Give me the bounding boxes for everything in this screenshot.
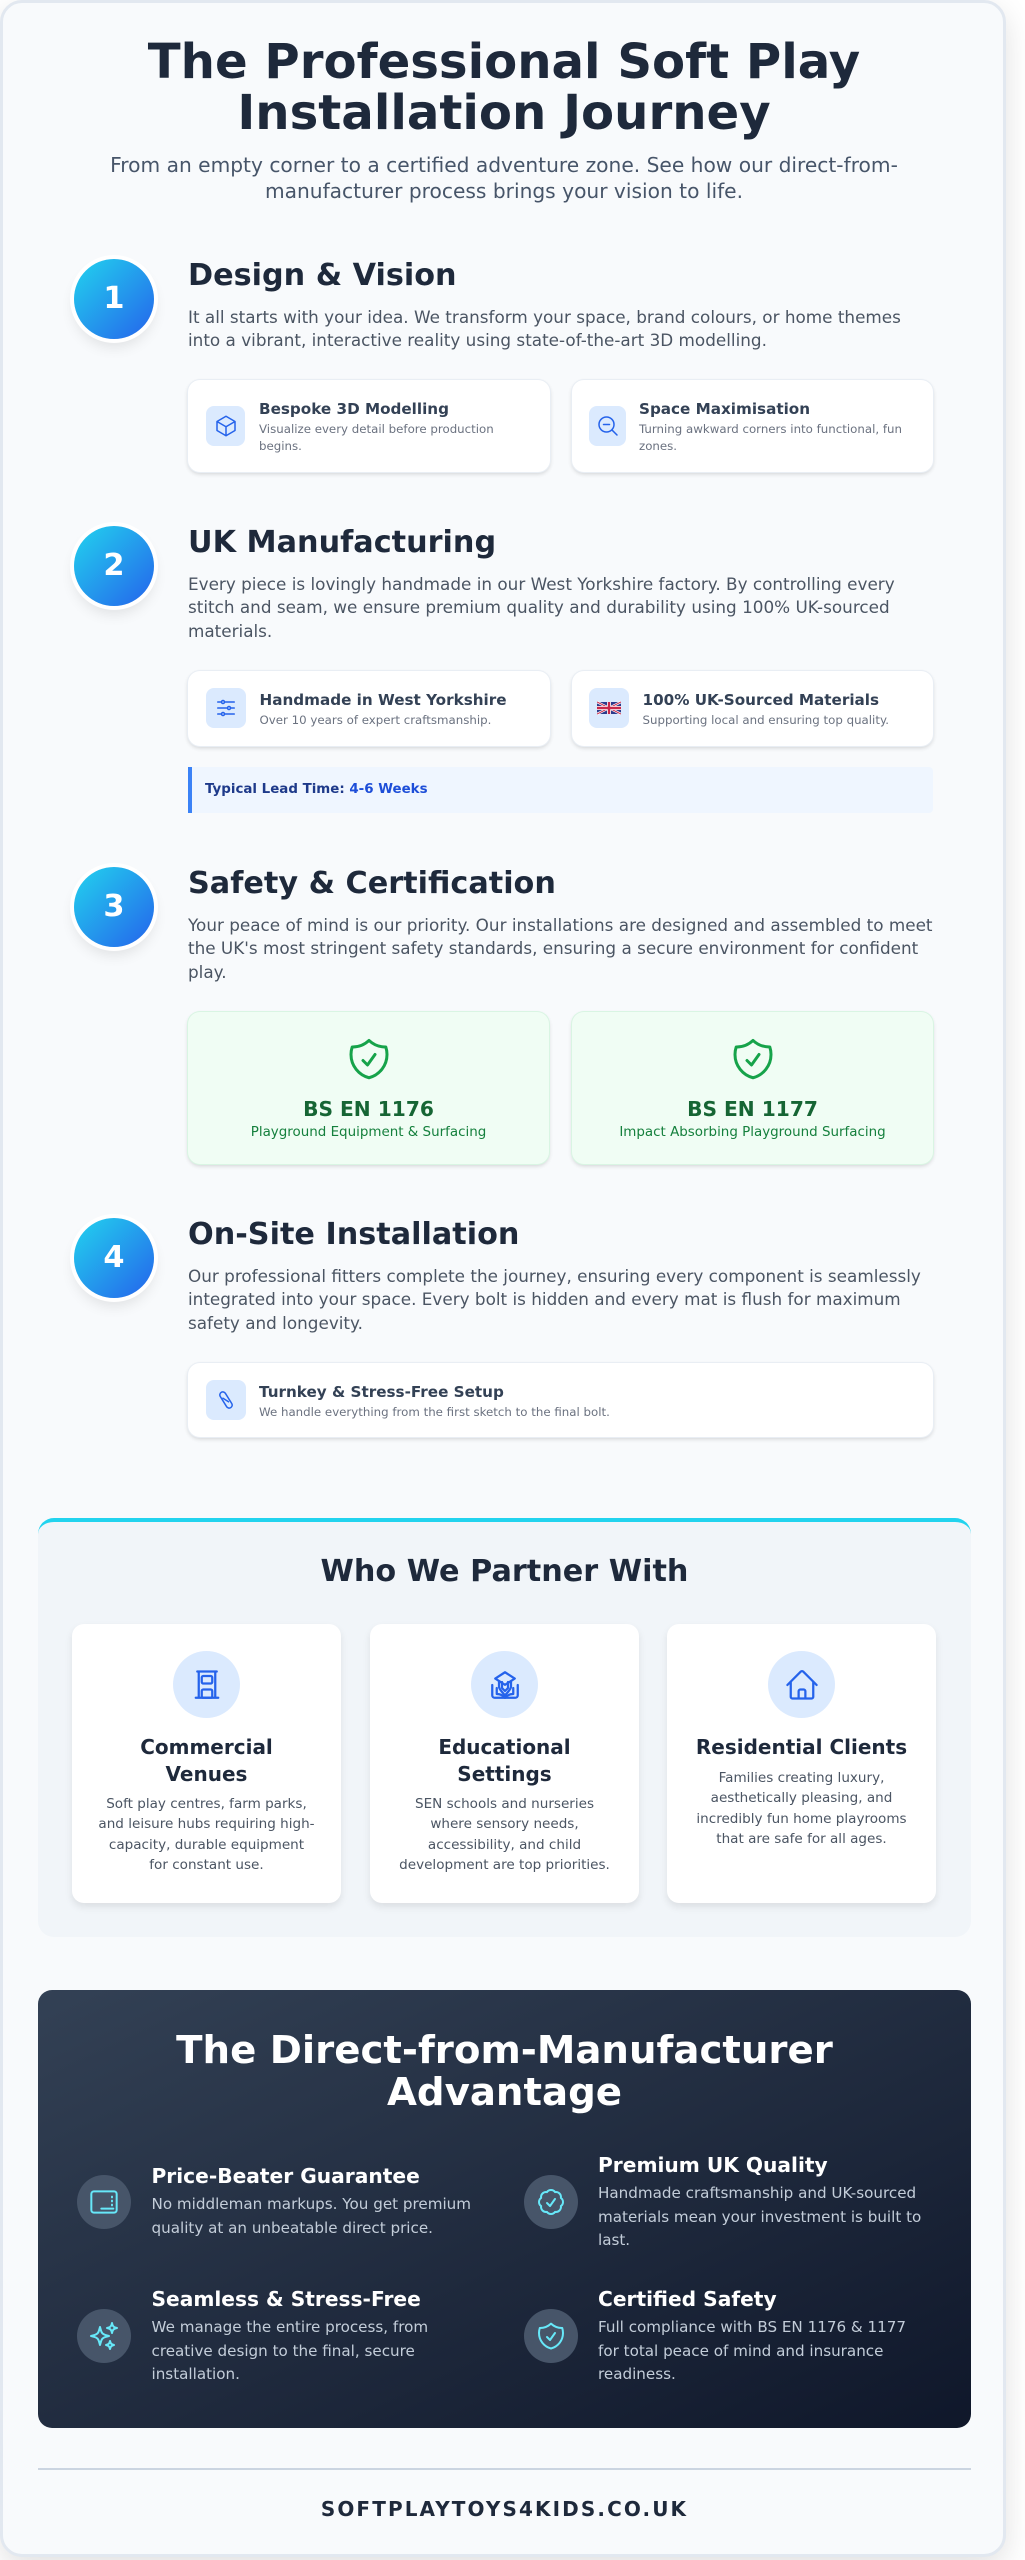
panel: direct-from-manufacturer advantage [38, 1990, 971, 2428]
benefit text: last. [598, 2231, 630, 2249]
step 1 number badge: 1 [103, 281, 125, 316]
card description: Visualize every detail before production [259, 422, 494, 436]
title: The Professional Soft Play [148, 34, 860, 90]
benefit text: Handmade craftsmanship and UK-sourced [598, 2184, 916, 2202]
certification code: BS EN 1176 [303, 1097, 434, 1121]
card title: Settings [457, 1762, 552, 1786]
step 4 heading: On-Site Installation [188, 1217, 519, 1252]
benefit title: Price-Beater Guarantee [152, 2164, 420, 2188]
card title: Bespoke 3D Modelling [259, 400, 449, 418]
step 1 heading: Design & Vision [188, 258, 457, 293]
step 2 text [188, 574, 895, 641]
card title [140, 1735, 273, 1786]
step 3 number badge [74, 867, 154, 947]
step 3 text: the UK's most stringent safety standards, ensuring a secure environment for confident [188, 938, 918, 958]
footer website: SOFTPLAYTOYS4KIDS.CO.UK [321, 2497, 688, 2521]
card title: Turnkey & Stress-Free Setup [259, 1382, 504, 1400]
icon: magnifier minus [589, 406, 626, 446]
benefit text: creative design to the final, secure [152, 2342, 415, 2360]
step 4 number badge: 4 [103, 1240, 125, 1275]
title: Installation Journey [237, 85, 771, 141]
card: residential clients [667, 1624, 936, 1903]
step 4 text: integrated into your space. Every bolt is hidden and every mat is flush for maximum [188, 1289, 901, 1309]
certification description: Impact Absorbing Playground Surfacing [619, 1125, 886, 1140]
step 3 number badge: 3 [103, 889, 125, 924]
icon: shield check [350, 1038, 388, 1080]
card description: development are top priorities. [399, 1857, 610, 1873]
icon: graduation cap and book [471, 1651, 538, 1718]
icon: price tablet [77, 2175, 131, 2229]
card description: Families creating luxury, [719, 1770, 884, 1786]
card description: begins. [259, 439, 302, 453]
card description: Over 10 years of expert craftsmanship. [260, 712, 491, 726]
card description: Soft play centres, farm parks, [106, 1796, 307, 1812]
benefit text: for total peace of mind and insurance [598, 2342, 883, 2360]
card title: Handmade in West Yorkshire [260, 691, 507, 709]
card description: zones. [639, 439, 677, 453]
step 1 text: into a vibrant, interactive reality using state-of-the-art 3D modelling. [188, 330, 767, 350]
card description: SEN schools and nurseries [415, 1796, 594, 1812]
certification card: BS EN 1177 [572, 1012, 933, 1164]
benefit text [152, 2195, 471, 2237]
card description [259, 422, 494, 453]
certification card: BS EN 1176 [188, 1012, 549, 1164]
card description [399, 1796, 610, 1873]
benefit text: Full compliance with BS EN 1176 & 1177 [598, 2318, 906, 2336]
benefit title: Premium UK Quality [598, 2153, 828, 2177]
icon: house [768, 1651, 835, 1718]
benefit text [598, 2318, 906, 2383]
card description: accessibility, and child [428, 1837, 581, 1853]
icon: building [173, 1651, 240, 1718]
step 2 heading: UK Manufacturing [188, 525, 496, 560]
card: 100% UK-Sourced Materials [572, 671, 933, 746]
heading: advantage [176, 2028, 833, 2114]
card description: that are safe for all ages. [716, 1831, 887, 1847]
certification code: BS EN 1177 [687, 1097, 818, 1121]
benefit text: readiness. [598, 2365, 676, 2383]
benefit text [152, 2318, 428, 2383]
icon: sliders [206, 688, 246, 728]
card: Space Maximisation [572, 380, 933, 472]
card description: Supporting local and ensuring top quality. [642, 712, 889, 726]
card title: Venues [166, 1762, 247, 1786]
card: educational settings [370, 1624, 639, 1903]
panel: who we partner with [38, 1518, 971, 1937]
step 4 text: safety and longevity. [188, 1313, 363, 1333]
card description: aesthetically pleasing, and [711, 1790, 892, 1806]
icon: sparkles [77, 2309, 131, 2363]
card description: for constant use. [149, 1857, 264, 1873]
icon: cube [206, 406, 245, 446]
step 3 text: play. [188, 962, 227, 982]
card title [438, 1735, 571, 1786]
icon: check badge [524, 2175, 578, 2229]
step 3 text: Your peace of mind is our priority. Our installations are designed and assembled to meet [188, 914, 933, 934]
card title: Commercial [140, 1735, 273, 1759]
icon: wrench [206, 1380, 246, 1420]
step 3 heading: Safety & Certification [188, 866, 556, 901]
card description: where sensory needs, [430, 1816, 579, 1832]
icon: UK flag [589, 688, 629, 728]
card description: Turning awkward corners into functional, fun [639, 422, 902, 436]
benefit text: quality at an unbeatable direct price. [152, 2219, 433, 2237]
card title: Educational [438, 1735, 571, 1759]
step 1 text: It all starts with your idea. We transform your space, brand colours, or home themes [188, 306, 901, 326]
card description [696, 1770, 907, 1847]
icon: shield check [734, 1038, 772, 1080]
heading: who we partner with: Who We Partner With [321, 1554, 688, 1589]
title [148, 34, 860, 141]
benefit text: We manage the entire process, from [152, 2318, 428, 2336]
icon: shield check [524, 2309, 578, 2363]
subtitle: manufacturer process brings your vision to life. [265, 179, 743, 203]
benefit title: Certified Safety [598, 2287, 777, 2311]
benefit text: No middleman markups. You get premium [152, 2195, 471, 2213]
step 4 text [188, 1266, 921, 1333]
step 1 text [188, 306, 901, 350]
step 4 text: Our professional fitters complete the journey, ensuring every component is seamlessly [188, 1266, 921, 1286]
benefit text: materials mean your investment is built to [598, 2208, 921, 2226]
benefit text [598, 2184, 921, 2249]
benefit title: Seamless & Stress-Free [152, 2287, 421, 2311]
card: commercial venues [72, 1624, 341, 1903]
card title: 100% UK-Sourced Materials [642, 691, 879, 709]
step 3 text [188, 914, 933, 982]
step 2 number badge: 2 [103, 548, 125, 583]
step 4 number badge [74, 1218, 154, 1298]
card description: incredibly fun home playrooms [696, 1811, 907, 1827]
card description: We handle everything from the first sketch to the final bolt. [259, 1404, 610, 1418]
step 1 number badge [74, 259, 154, 339]
card: Turnkey & Stress-Free Setup [188, 1363, 933, 1437]
card title: Residential Clients [696, 1735, 907, 1759]
step 2 text: materials. [188, 621, 272, 641]
heading: advantage: The Direct-from-Manufacturer [176, 2028, 833, 2073]
step 2 text: Every piece is lovingly handmade in our West Yorkshire factory. By controlling every [188, 574, 895, 594]
card: Bespoke 3D Modelling [188, 380, 550, 472]
card description: and leisure hubs requiring high- [98, 1816, 315, 1832]
card description [638, 422, 902, 453]
card: Handmade in West Yorkshire [188, 671, 550, 746]
step 2 number badge [74, 526, 154, 606]
lead time callout: Typical Lead Time: 4-6 Weeks [205, 782, 428, 797]
subtitle [110, 152, 898, 203]
card description [98, 1796, 315, 1873]
certification description: Playground Equipment & Surfacing [251, 1125, 486, 1140]
step 2 text: stitch and seam, we ensure premium quality and durability using 100% UK-sourced [188, 597, 890, 617]
subtitle: From an empty corner to a certified adventure zone. See how our direct-from- [110, 152, 898, 176]
lead time callout [188, 767, 933, 813]
benefit text: installation. [152, 2365, 240, 2383]
heading: advantage: Advantage [387, 2070, 622, 2114]
card description: capacity, durable equipment [109, 1837, 304, 1853]
card title: Space Maximisation [639, 400, 810, 418]
